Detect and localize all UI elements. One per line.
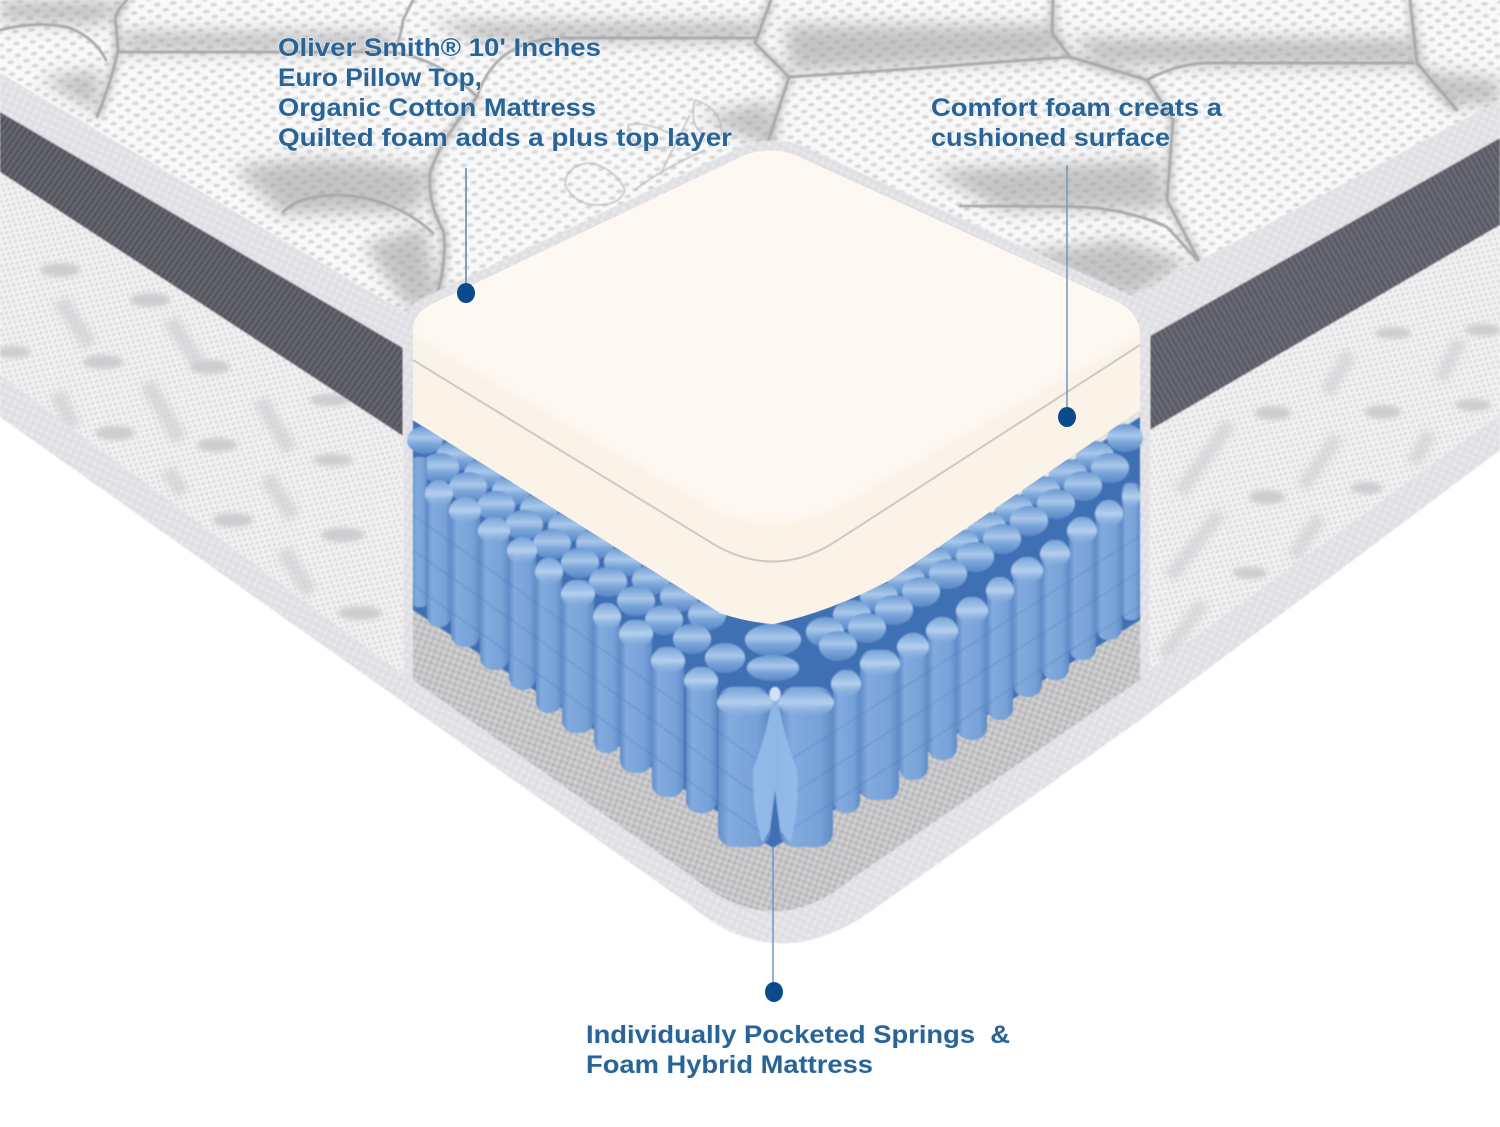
- pocket springs: [407, 417, 1143, 848]
- dark stripe right: [1150, 138, 1500, 430]
- mattress top quilted surface: [0, 0, 1500, 340]
- spring pocket seams: [413, 515, 1140, 841]
- marker dot: comfort foam: [1058, 407, 1076, 427]
- label: comfort foam text: [931, 94, 1223, 152]
- leader line: pocket springs: [772, 848, 774, 985]
- grey felt base layer: [413, 590, 1140, 911]
- left side panel: [0, 73, 413, 700]
- knit base: [0, 0, 1500, 340]
- quilting patches left: [0, 263, 382, 620]
- dark stripe left: [0, 112, 403, 436]
- leader line: pillow top: [465, 168, 467, 290]
- pad shadows: [0, 0, 1500, 312]
- cream comfort foam layer: [413, 140, 1140, 624]
- label: pillow top text: [278, 34, 732, 152]
- callout: pillow top: [278, 34, 732, 303]
- dark spring background: [413, 417, 1140, 848]
- label: pillow top text: Oliver Smith® 10' Inches: [278, 34, 601, 62]
- right side panel: [1130, 100, 1500, 690]
- label: pocket springs text: Foam Hybrid Mattress: [586, 1051, 873, 1079]
- corner pocket fold: [753, 700, 798, 843]
- label: pocket springs text: Individually Pocketed Springs &: [586, 1021, 1010, 1049]
- marker dot: pocket springs: [765, 982, 783, 1002]
- back rows of spring tops: [407, 424, 1143, 681]
- bottom piping band and window frame: [0, 140, 1500, 943]
- knit side face left: [0, 170, 403, 700]
- foam layer seam: [413, 345, 1140, 562]
- quilting patches right: [1163, 324, 1500, 657]
- label: pillow top text: Quilted foam adds a plus top layer: [278, 124, 732, 152]
- piping top band right: [1130, 100, 1500, 435]
- foam block: [413, 150, 1140, 624]
- quilting channel glow: [97, 0, 1457, 300]
- callout: comfort foam: [931, 94, 1223, 427]
- quilting channels: [0, 0, 1457, 300]
- foam top surface: [413, 140, 1140, 523]
- label: pillow top text: Organic Cotton Mattress: [278, 94, 596, 122]
- label: comfort foam text: Comfort foam creats a: [931, 94, 1223, 122]
- icon: cotton logo embroidery: [565, 100, 722, 205]
- knit side face right: [1150, 222, 1500, 690]
- front spring columns: [413, 457, 1140, 847]
- callout: pocket springs: [586, 848, 1010, 1079]
- marker dot: pillow top: [457, 283, 475, 303]
- spring caps: [425, 481, 1140, 717]
- corner diamond highlight: [770, 687, 780, 701]
- label: comfort foam text: cushioned surface: [931, 124, 1170, 152]
- label: pillow top text: Euro Pillow Top,: [278, 64, 482, 92]
- label: pocket springs text: [586, 1021, 1010, 1079]
- leader line: comfort foam: [1066, 165, 1068, 410]
- piping top band left: [0, 73, 413, 440]
